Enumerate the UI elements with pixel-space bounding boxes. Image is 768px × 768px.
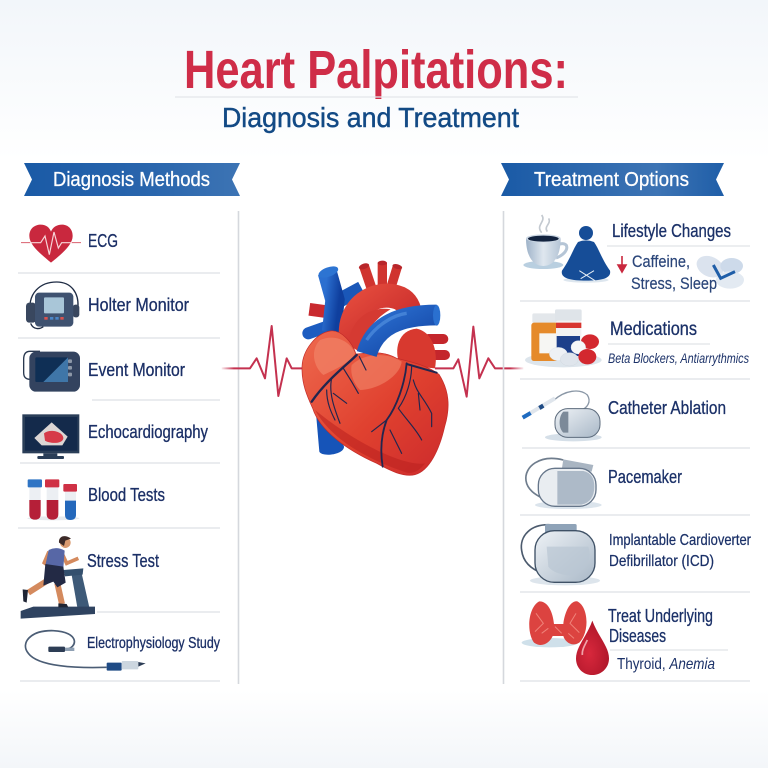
label: Implantable Cardioverter Defibrillator (ICD): [609, 532, 752, 570]
icon: Holter monitor: [26, 282, 79, 329]
heading ribbon: diagnosis methods: [24, 163, 240, 196]
label: Treat Underlying Diseases: Treat Underlying: [608, 606, 713, 626]
label: caffeine, stress, sleep: [631, 252, 717, 293]
label: Holter Monitor: Holter Monitor: [88, 295, 189, 315]
label: Treat Underlying Diseases: [608, 606, 713, 646]
icon: blood test tubes: [27, 479, 79, 520]
heading ribbon: diagnosis methods: Diagnosis Methods: [53, 169, 210, 191]
label: Catheter Ablation: Catheter Ablation: [608, 398, 726, 418]
ECG trace: left: [222, 326, 303, 396]
ECG trace: right: [435, 327, 523, 397]
heading ribbon: treatment options: [501, 163, 724, 196]
icon: blood drop: [576, 621, 609, 675]
icon: catheter ablation device: [523, 391, 602, 441]
icon: pills: [693, 252, 744, 289]
label: thyroid, anemia: Thyroid, Anemia: [617, 656, 715, 673]
label: Event Monitor: Event Monitor: [88, 360, 185, 380]
heading ribbon: treatment options: Treatment Options: [534, 169, 689, 191]
icon: coffee cup: [523, 215, 567, 269]
heart highlights: [314, 338, 425, 473]
coronary vessels: [312, 355, 437, 467]
icon: medication bottles and pills: [525, 309, 602, 367]
pulmonary artery: [367, 305, 440, 354]
icon: implantable defibrillator: [521, 524, 600, 585]
icon: event monitor: [24, 351, 80, 392]
central heart illustration: [222, 261, 523, 475]
label: ECG: ECG: [88, 231, 118, 251]
subtitle: Diagnosis and Treatment: [222, 102, 519, 133]
label: Pacemaker: Pacemaker: [608, 467, 682, 487]
icon: meditating figure: [562, 226, 610, 283]
label: Stress Test: Stress Test: [87, 551, 159, 571]
label: Lifestyle Changes: Lifestyle Changes: [612, 221, 731, 241]
icon: pacemaker: [526, 458, 602, 509]
icon: down arrow: [618, 256, 626, 272]
label: Electrophysiology Study: Electrophysiology Study: [87, 635, 220, 652]
panel: treatment options: [501, 163, 752, 684]
label: Medications: Medications: [610, 319, 697, 340]
icon: treadmill runner: [21, 536, 95, 619]
label: Blood Tests: Blood Tests: [88, 485, 165, 505]
icon: electrophysiology catheter: [25, 631, 146, 671]
heart vessels: back: [308, 261, 445, 455]
icon: echocardiography screen: [22, 414, 79, 459]
title: Heart Palpitations:: [184, 40, 568, 100]
panel: diagnosis methods: [18, 163, 240, 684]
heart body: [302, 331, 448, 475]
label: Echocardiography: Echocardiography: [88, 422, 208, 442]
label: Implantable Cardioverter Defibrillator (ICD): Defibrillator (ICD): [609, 553, 714, 570]
icon: ECG heart: [21, 225, 81, 263]
label: Treat Underlying Diseases: Diseases: [609, 626, 666, 646]
label: caffeine, stress, sleep: Caffeine,: [632, 252, 690, 271]
label: caffeine, stress, sleep: Stress, Sleep: [631, 274, 717, 293]
icon: thyroid gland: [522, 601, 587, 647]
